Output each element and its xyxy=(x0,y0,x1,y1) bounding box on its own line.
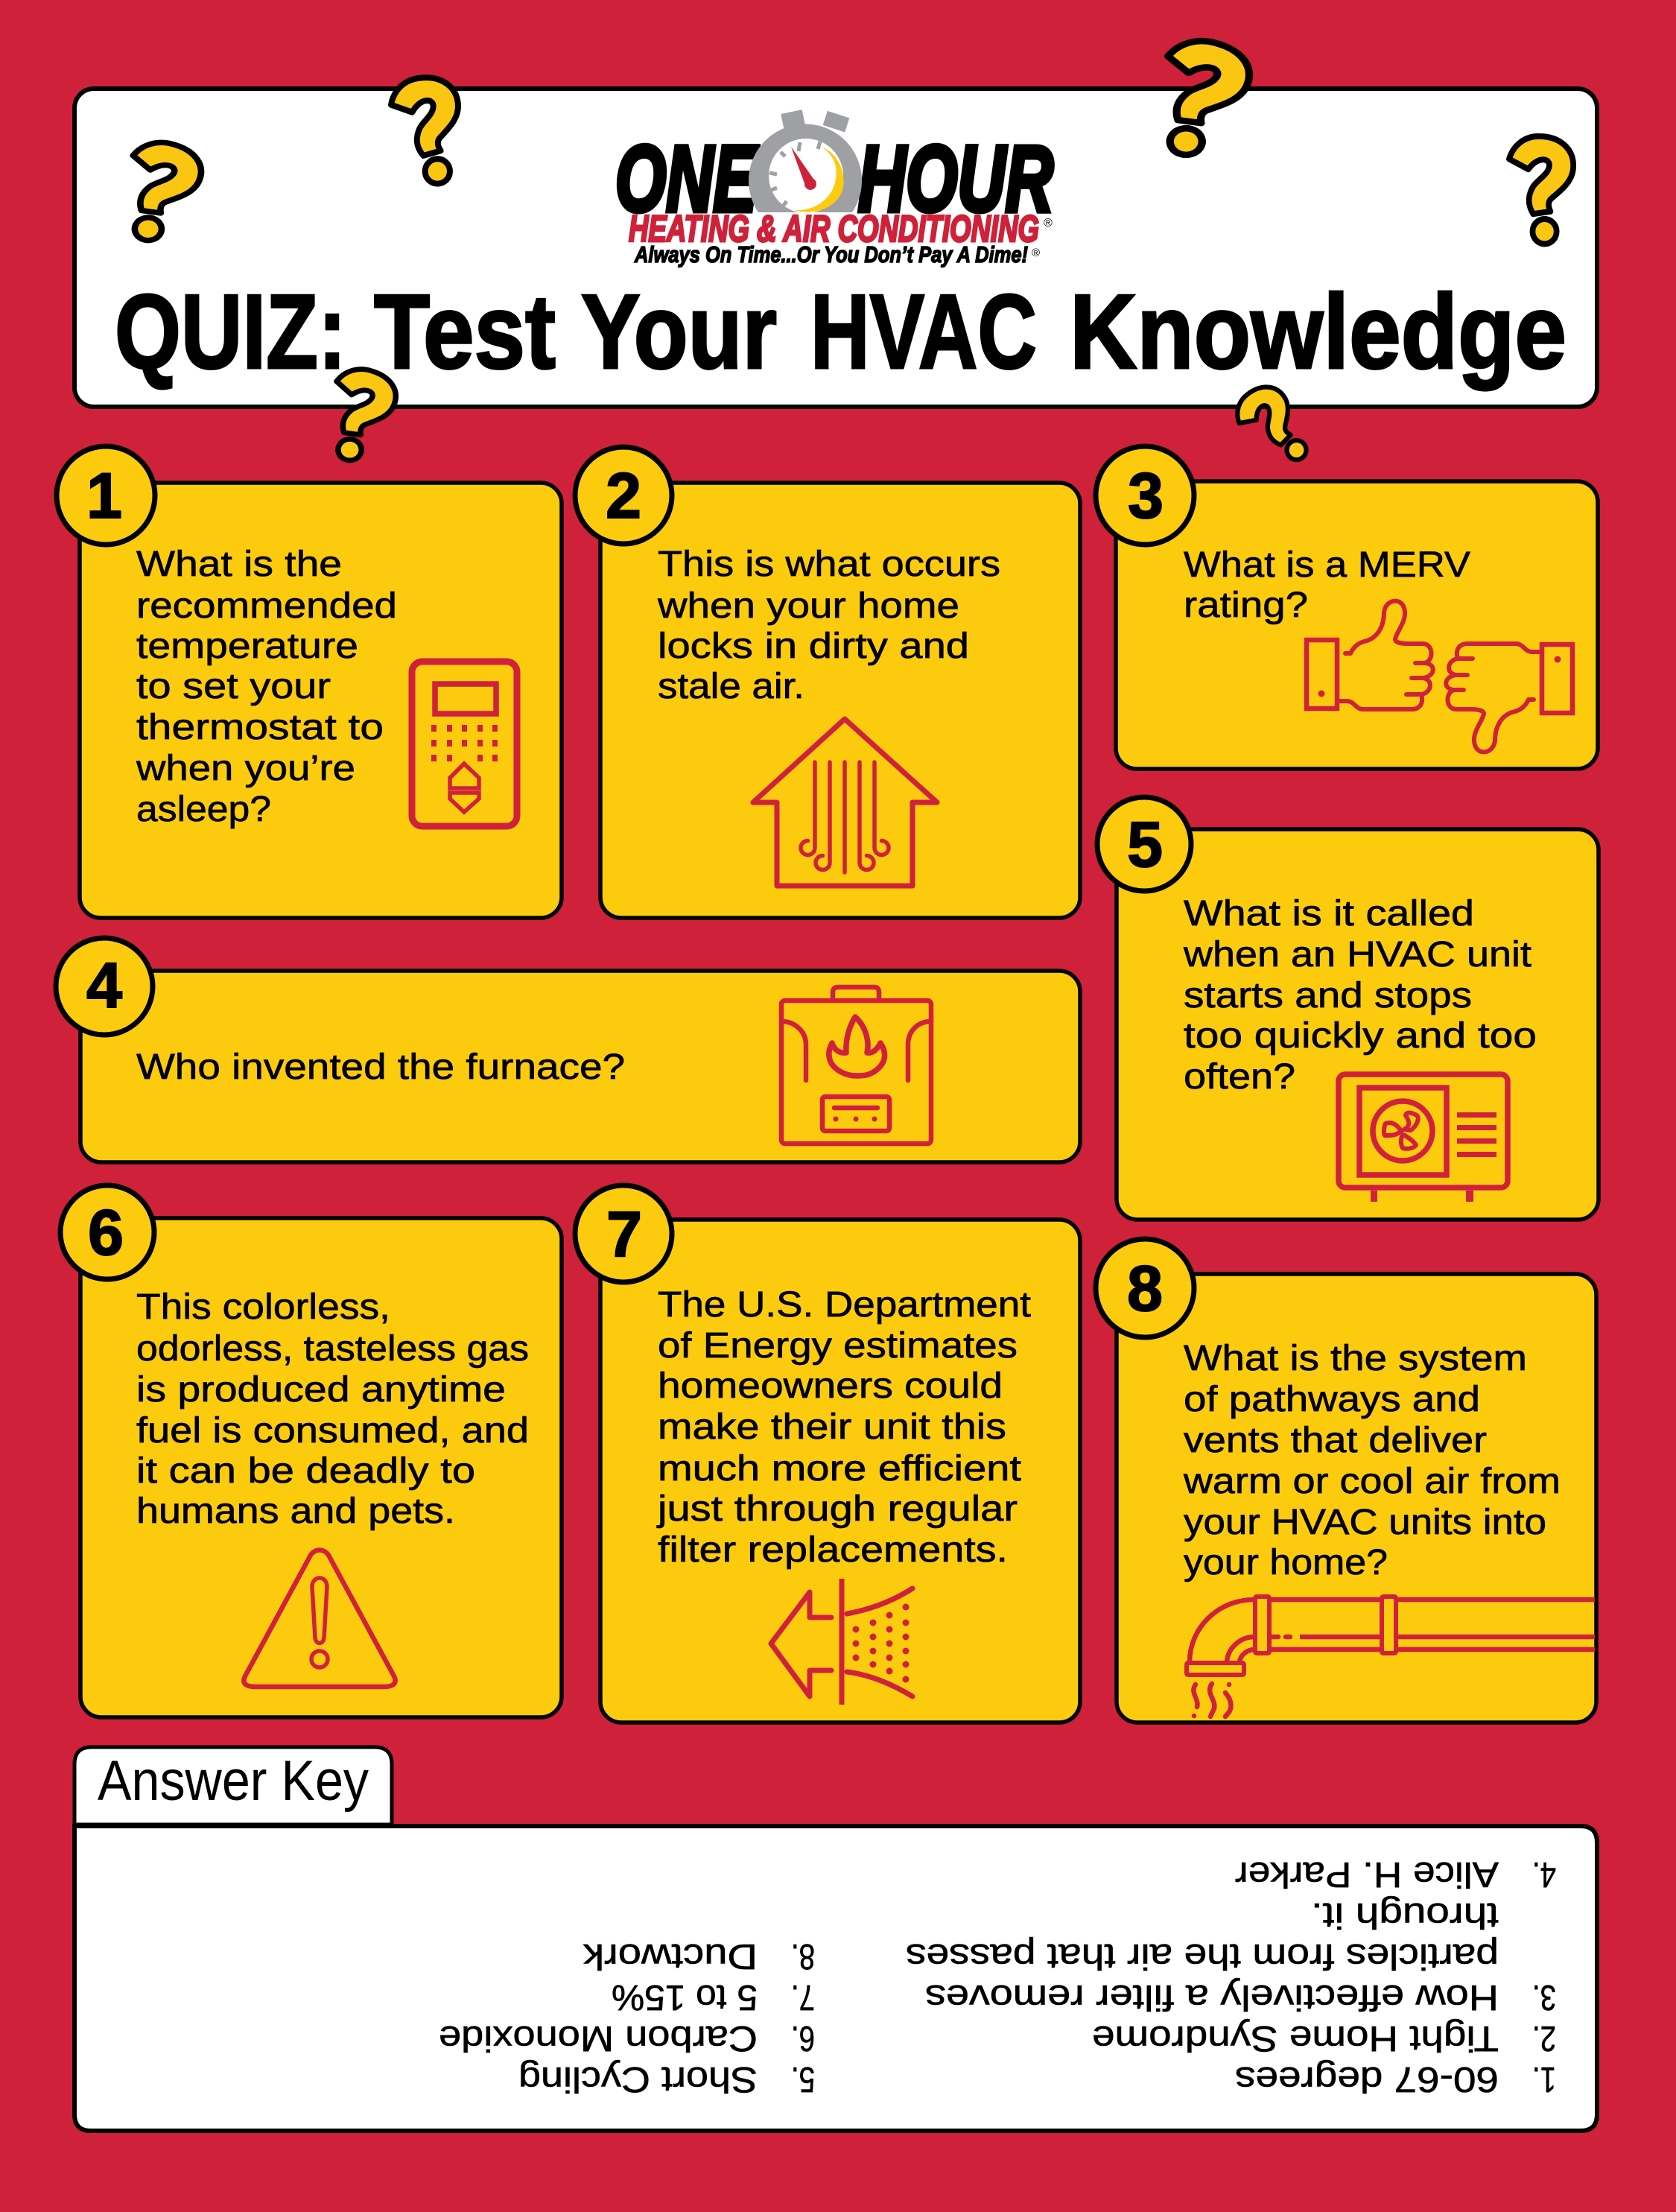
question 7 text: of Energy estimates xyxy=(658,1326,1018,1366)
question 1 text: asleep? xyxy=(136,790,271,829)
title: Test xyxy=(374,273,556,391)
number badge 1: 1 xyxy=(86,460,122,532)
icon: question mark 2 xyxy=(391,77,458,184)
icon: thumbs up xyxy=(1307,601,1433,709)
logo: One Hour Heating & Air Conditioning: HOUR xyxy=(858,127,1053,231)
answers 5 to 8, upside down: Short Cycling xyxy=(518,2059,758,2099)
question 6 text: odorless, tasteless gas xyxy=(136,1329,529,1369)
question 2 text xyxy=(657,545,1000,706)
question 8 text: What is the system xyxy=(1184,1339,1527,1378)
question 8 text: vents that deliver xyxy=(1184,1421,1487,1460)
question 1 text xyxy=(136,545,397,829)
answers 5 to 8, upside down xyxy=(439,1936,815,2099)
icon: question mark 4 xyxy=(1499,132,1577,247)
panel: answer key xyxy=(74,1747,1597,2131)
title: QUIZ: xyxy=(115,273,346,391)
question 8 text: your home? xyxy=(1184,1543,1388,1582)
icon: question mark 6 xyxy=(1228,378,1315,477)
number badge 6 xyxy=(60,1185,154,1279)
question 5 text: What is it called xyxy=(1184,894,1474,934)
question 7 text: just through regular xyxy=(656,1489,1018,1529)
icon: warning triangle xyxy=(244,1550,396,1687)
number badge 3 xyxy=(1096,446,1194,545)
question 1 text: temperature xyxy=(136,627,358,666)
answers 5 to 8, upside down: 5. xyxy=(791,2059,815,2099)
icon: thermostat xyxy=(412,662,517,826)
answers 1 to 4, upside down: particles from the air that passes xyxy=(906,1936,1499,1976)
number badge 5 xyxy=(1097,797,1191,891)
panel: question 6 xyxy=(60,1185,562,1717)
answer key tab: Answer Key xyxy=(98,1749,369,1813)
answers 1 to 4, upside down: 3. xyxy=(1532,1977,1556,2017)
panel: question 5 xyxy=(1097,797,1599,1220)
icon: outdoor AC unit xyxy=(1339,1074,1508,1202)
panel: header xyxy=(74,89,1597,407)
answers 5 to 8, upside down: 7. xyxy=(791,1977,815,2017)
answers 5 to 8, upside down: 6. xyxy=(791,2018,815,2058)
panel: question 2 xyxy=(575,447,1080,918)
panel: question 4 xyxy=(56,938,1080,1162)
question 8 text: of pathways and xyxy=(1184,1380,1480,1419)
logo: One Hour Heating & Air Conditioning xyxy=(615,110,1053,267)
answers 5 to 8, upside down: 8. xyxy=(791,1936,815,1976)
icon: furnace xyxy=(781,987,931,1144)
number badge 2: 2 xyxy=(606,460,641,532)
title: HVAC xyxy=(810,273,1037,391)
number badge 2 xyxy=(575,447,672,544)
number badge 3: 3 xyxy=(1128,460,1164,532)
logo: One Hour Heating & Air Conditioning: ® xyxy=(1032,247,1040,259)
question 7 text xyxy=(656,1285,1031,1570)
logo: One Hour Heating & Air Conditioning: ® xyxy=(1044,217,1053,229)
logo: One Hour Heating & Air Conditioning: HEATING & AIR CONDITIONING xyxy=(629,208,1039,250)
title xyxy=(115,273,1567,391)
question 7 text: make their unit this xyxy=(658,1407,1006,1447)
number badge 4 xyxy=(56,938,153,1035)
answers 1 to 4, upside down: 2. xyxy=(1532,2018,1556,2058)
icon: thumbs down xyxy=(1446,644,1572,752)
question 2 text: locks in dirty and xyxy=(658,627,969,666)
question 7 text: The U.S. Department xyxy=(658,1285,1031,1325)
question 8 text xyxy=(1183,1339,1561,1582)
question 6 text: it can be deadly to xyxy=(136,1451,475,1491)
answers 1 to 4, upside down: through it. xyxy=(1311,1895,1499,1935)
logo: One Hour Heating & Air Conditioning: Always On Time...Or You Don’t Pay A Dime! xyxy=(634,241,1028,267)
answers 1 to 4, upside down: How effectively a filter removes xyxy=(925,1977,1499,2017)
question 6 text: humans and pets. xyxy=(136,1492,455,1531)
question 3 text: What is a MERV xyxy=(1184,545,1470,585)
number badge 4: 4 xyxy=(86,950,122,1021)
question 2 text: when your home xyxy=(657,586,959,626)
panel: question 1 xyxy=(57,446,562,918)
question 3 text: rating? xyxy=(1184,586,1308,625)
question 1 text: to set your xyxy=(136,667,331,706)
answers 1 to 4, upside down: 4. xyxy=(1532,1854,1556,1894)
question 7 text: filter replacements. xyxy=(658,1530,1008,1570)
icon: house with stale air xyxy=(753,719,937,886)
number badge 8: 8 xyxy=(1127,1253,1163,1325)
question 8 text: your HVAC units into xyxy=(1184,1503,1546,1542)
icon: question mark 1 xyxy=(97,133,211,247)
answer key box xyxy=(74,1826,1597,2131)
question 2 text: This is what occurs xyxy=(658,545,1000,584)
answers 5 to 8, upside down: Carbon Monoxide xyxy=(439,2018,758,2058)
answers 1 to 4, upside down: Tight Home Syndrome xyxy=(1092,2018,1499,2058)
panel: question 3 xyxy=(1096,446,1598,769)
question 1 text: when you’re xyxy=(136,749,355,788)
question 2 text: stale air. xyxy=(658,667,804,706)
number badge 7: 7 xyxy=(606,1199,642,1270)
panel: question 7 xyxy=(575,1185,1080,1723)
question 6 text: This colorless, xyxy=(136,1287,390,1327)
question 1 text: What is the xyxy=(136,545,342,584)
answers 1 to 4, upside down xyxy=(906,1854,1556,2099)
question 8 text: warm or cool air from xyxy=(1183,1462,1561,1501)
answers 1 to 4, upside down: 60-67 degrees xyxy=(1235,2059,1499,2099)
question 5 text: too quickly and too xyxy=(1184,1016,1537,1056)
answers 5 to 8, upside down: 5 to 15% xyxy=(612,1977,758,2017)
number badge 1 xyxy=(57,446,155,545)
question 5 text: often? xyxy=(1184,1057,1295,1097)
question 6 text: fuel is consumed, and xyxy=(136,1411,529,1451)
question 5 text xyxy=(1183,894,1537,1097)
number badge 8 xyxy=(1096,1239,1194,1337)
title: Your xyxy=(581,273,777,391)
question 1 text: recommended xyxy=(136,586,397,626)
logo: One Hour Heating & Air Conditioning: ONE xyxy=(615,127,759,231)
icon: question mark 3 xyxy=(1125,30,1261,163)
question 6 text: is produced anytime xyxy=(136,1370,506,1410)
question 7 text: much more efficient xyxy=(658,1449,1021,1489)
question 3 text xyxy=(1184,545,1470,625)
icon: duct pipe xyxy=(1187,1597,1595,1717)
question 1 text: thermostat to xyxy=(136,708,384,747)
number badge 5: 5 xyxy=(1127,809,1163,881)
answers 5 to 8, upside down: Ductwork xyxy=(583,1936,758,1976)
question 4 text: Who invented the furnace? xyxy=(136,1048,625,1087)
question 6 text xyxy=(136,1287,529,1531)
question 5 text: starts and stops xyxy=(1184,976,1472,1015)
question 7 text: homeowners could xyxy=(658,1366,1003,1406)
panel: question 8 xyxy=(1096,1239,1596,1723)
title: Knowledge xyxy=(1070,273,1567,391)
answers 1 to 4, upside down: Alice H. Parker xyxy=(1235,1854,1499,1894)
icon: question mark 5 xyxy=(305,361,404,467)
number badge 7 xyxy=(575,1185,672,1282)
answers 1 to 4, upside down: 1. xyxy=(1532,2059,1556,2099)
icon: air filter with arrow xyxy=(771,1579,912,1705)
number badge 6: 6 xyxy=(88,1197,124,1269)
question 5 text: when an HVAC unit xyxy=(1183,935,1531,975)
